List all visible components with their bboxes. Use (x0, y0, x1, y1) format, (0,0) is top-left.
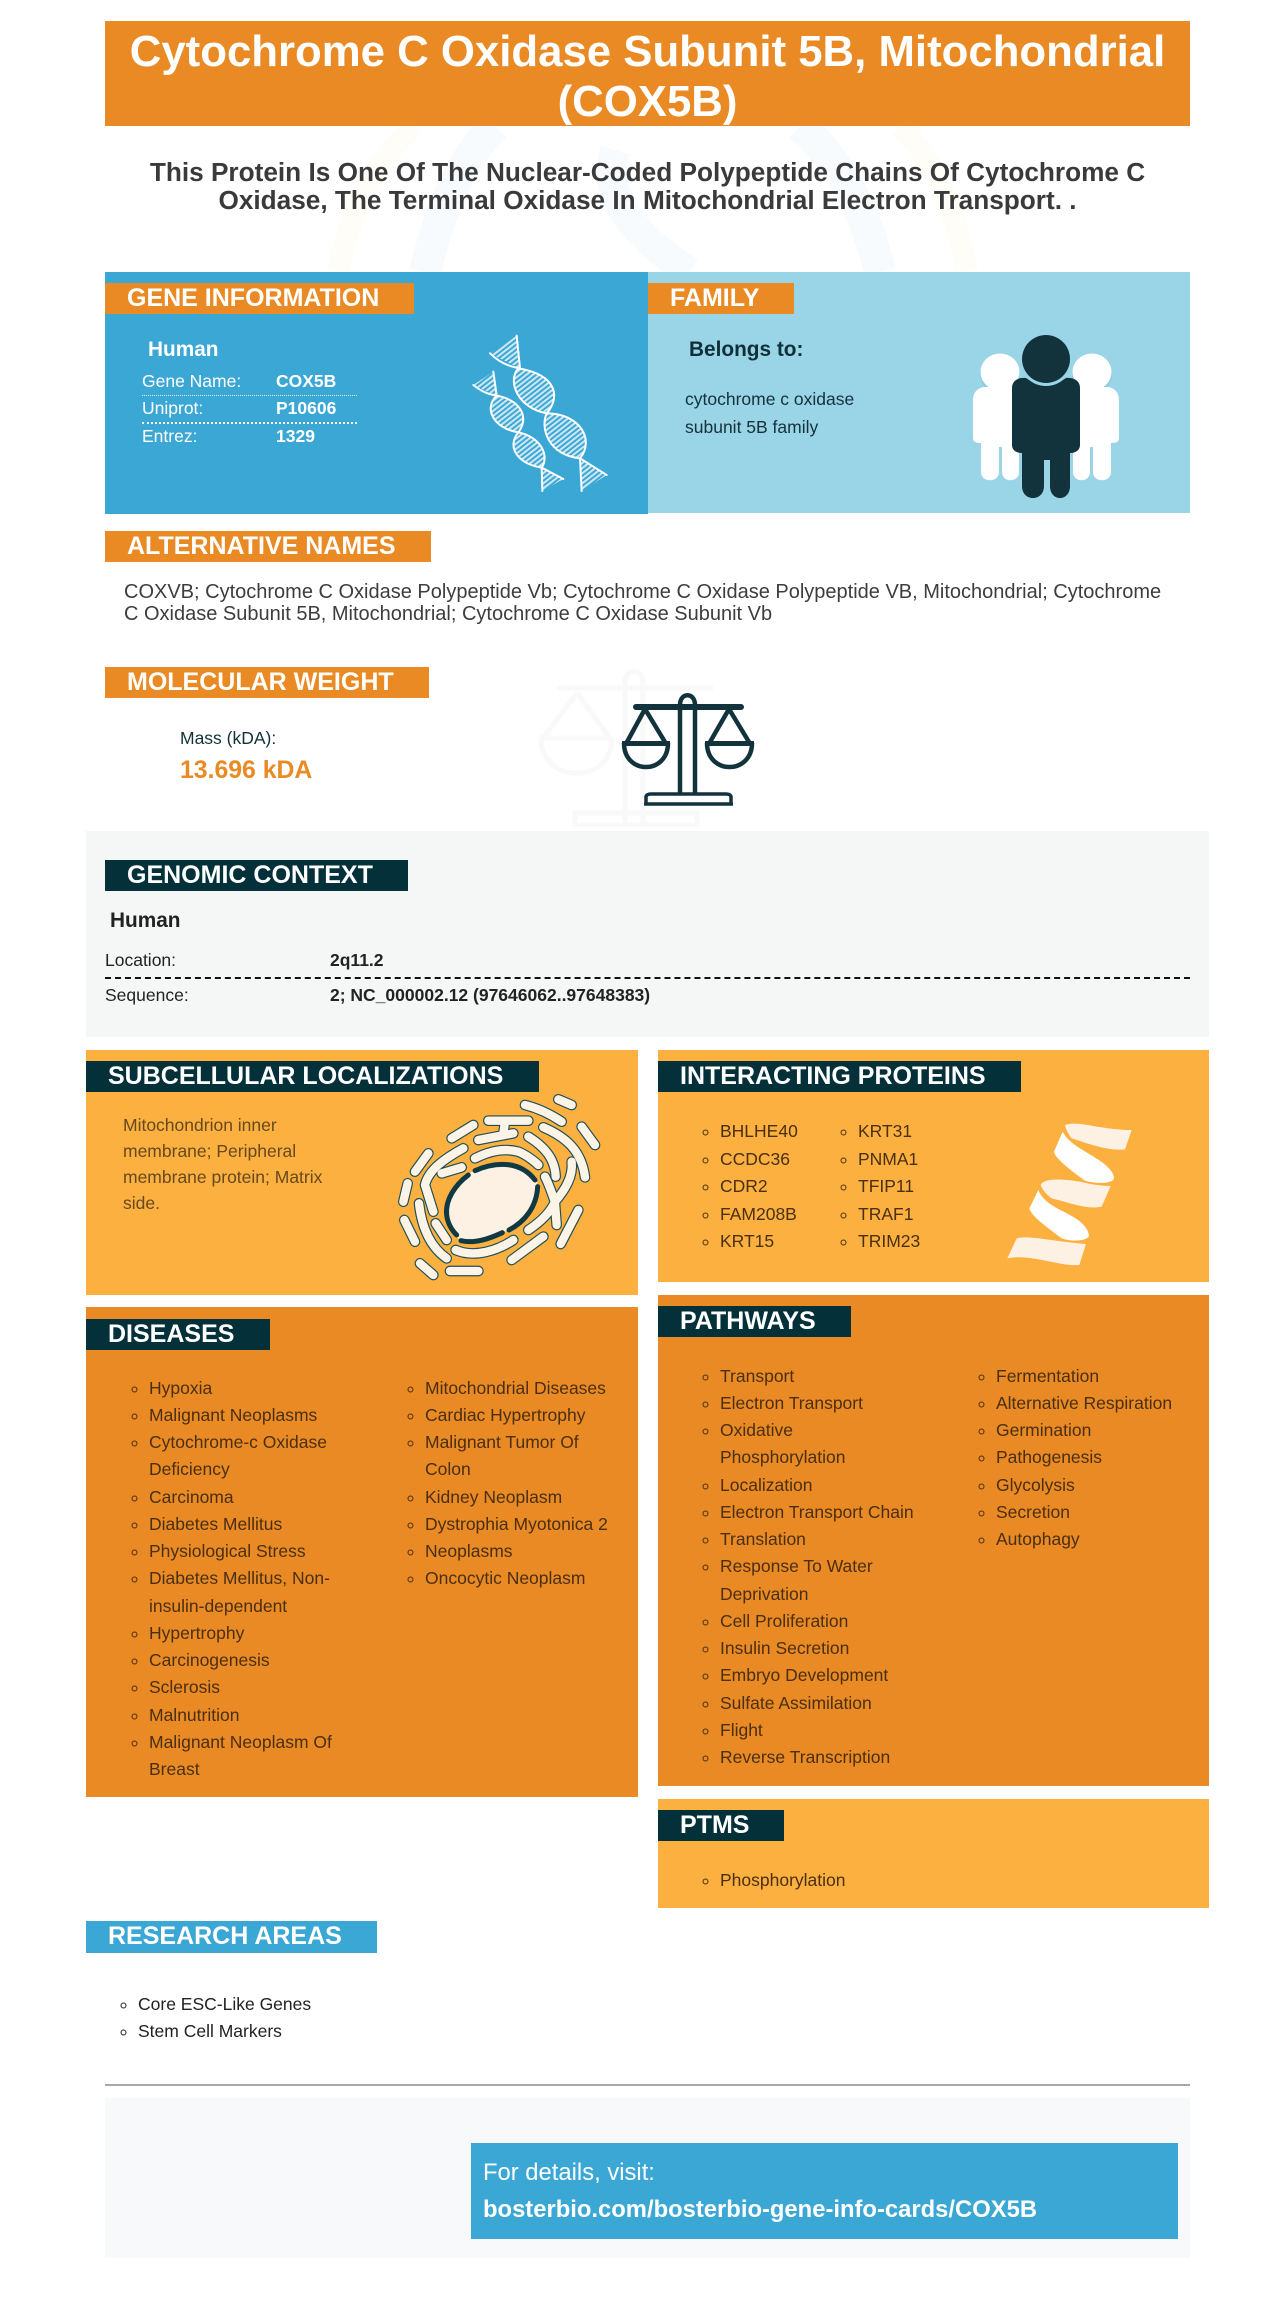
panel: subcellular localizations (86, 1050, 638, 1295)
sequence row (105, 985, 650, 1005)
family description (685, 389, 854, 437)
protein list column 2: TFIP11 (858, 1176, 914, 1196)
icon: protein helix ribbon (1007, 1124, 1132, 1266)
heading: diseases (86, 1319, 270, 1350)
pathway list column 1: Embryo Development (720, 1665, 888, 1685)
disease list column 2 (408, 1378, 608, 1588)
disease list column 1: Malnutrition (149, 1704, 239, 1724)
subtitle (150, 157, 1145, 215)
disease list column 1: Sclerosis (149, 1677, 220, 1697)
species label: Human (110, 909, 180, 932)
heading: family: FAMILY (670, 284, 759, 312)
protein list column 1 (702, 1121, 798, 1251)
pathway list column 2: Pathogenesis (996, 1447, 1102, 1467)
panel: genomic context: 2q11.2 (330, 950, 384, 970)
pathway list column 1: Deprivation (720, 1584, 809, 1604)
title: Cytochrome C Oxidase Subunit 5B, Mitochondrial (130, 27, 1165, 76)
uniprot row: P10606 (276, 398, 336, 418)
pathway list column 1: Insulin Secretion (720, 1638, 849, 1658)
callout: details link (471, 2143, 1178, 2239)
alternative names text (124, 581, 1161, 625)
disease list column 2: Mitochondrial Diseases (425, 1378, 606, 1398)
heading: ptms: PTMS (680, 1811, 749, 1839)
ptm list: Phosphorylation (720, 1870, 846, 1890)
panel: footer (105, 2098, 1190, 2258)
pathway list column 1: Response To Water (720, 1556, 873, 1576)
protein list column 2 (840, 1121, 920, 1251)
pathway list column 1: Cell Proliferation (720, 1611, 848, 1631)
icon: dna (472, 334, 608, 492)
panel: family (648, 272, 1190, 513)
callout: details link: For details, visit: (483, 2159, 655, 2186)
heading: subcellular localizations: SUBCELLULAR LOCALIZATIONS (108, 1062, 503, 1090)
gene name row: COX5B (276, 371, 336, 391)
heading: research areas: RESEARCH AREAS (108, 1922, 342, 1950)
disease list column 1: Hypertrophy (149, 1623, 244, 1643)
disease list column 1: Carcinoma (149, 1486, 234, 1506)
entrez row: Entrez: (142, 426, 197, 446)
disease list column 2: Malignant Tumor Of (425, 1432, 579, 1452)
entrez row (142, 426, 315, 446)
panel: genomic context (86, 831, 1209, 1037)
gene name row (142, 371, 336, 391)
sequence row: Sequence: (105, 985, 189, 1005)
mass label: Mass (kDA): (180, 728, 276, 748)
panel: diseases (86, 1307, 638, 1797)
pathway list column 1: Translation (720, 1529, 806, 1549)
pathway list column 1: Phosphorylation (720, 1447, 846, 1467)
entrez row: 1329 (276, 426, 315, 446)
icon: mitochondrion (398, 1094, 600, 1280)
family description: cytochrome c oxidase (685, 389, 854, 409)
disease list column 1: Physiological Stress (149, 1541, 306, 1561)
localization text (123, 1115, 322, 1213)
disease list column 1: insulin-dependent (149, 1596, 287, 1616)
protein list column 1: FAM208B (720, 1204, 797, 1224)
heading: genomic context: GENOMIC CONTEXT (127, 861, 373, 889)
disease list column 1: Malignant Neoplasms (149, 1405, 317, 1425)
disease list column 2: Oncocytic Neoplasm (425, 1568, 585, 1588)
disease list column 2: Dystrophia Myotonica 2 (425, 1514, 608, 1534)
localization text: membrane protein; Matrix (123, 1167, 322, 1187)
pathway list column 1: Localization (720, 1474, 812, 1494)
pathway list column 2 (978, 1366, 1172, 1549)
pathway list column 1: Sulfate Assimilation (720, 1692, 872, 1712)
disease list column 2: Neoplasms (425, 1541, 513, 1561)
heading: pathways: PATHWAYS (680, 1307, 816, 1335)
uniprot row (142, 398, 336, 418)
belongs to label: Belongs to: (689, 338, 803, 361)
heading: interacting proteins: INTERACTING PROTEINS (680, 1062, 986, 1090)
disease list column 1: Malignant Neoplasm Of (149, 1732, 332, 1752)
protein list column 2: KRT31 (858, 1121, 912, 1141)
heading: diseases: DISEASES (108, 1320, 234, 1348)
pathway list column 2: Germination (996, 1420, 1091, 1440)
icon: people (973, 335, 1119, 498)
pathway list column 1: Oxidative (720, 1420, 793, 1440)
pathway list column 2: Fermentation (996, 1366, 1099, 1386)
uniprot row: Uniprot: (142, 398, 203, 418)
gene name row: Gene Name: (142, 371, 241, 391)
disease list column 1 (132, 1378, 332, 1779)
subtitle: Oxidase, The Terminal Oxidase In Mitochondrial Electron Transport. . (218, 185, 1077, 215)
title: (COX5B) (558, 77, 737, 126)
pathway list column 2: Secretion (996, 1502, 1070, 1522)
panel: ptms (658, 1799, 1209, 1908)
pathway list column 1: Reverse Transcription (720, 1747, 890, 1767)
protein list column 1: KRT15 (720, 1231, 774, 1251)
protein list column 1: CCDC36 (720, 1148, 790, 1168)
protein list column 1: CDR2 (720, 1176, 768, 1196)
disease list column 1: Cytochrome-c Oxidase (149, 1432, 327, 1452)
pathway list column 1: Electron Transport Chain (720, 1502, 914, 1522)
protein list column 1: BHLHE40 (720, 1121, 798, 1141)
family description: subunit 5B family (685, 417, 818, 437)
heading: alternative names: ALTERNATIVE NAMES (127, 532, 396, 560)
heading: molecular weight: MOLECULAR WEIGHT (127, 668, 394, 696)
protein list column 2: PNMA1 (858, 1148, 918, 1168)
title (105, 21, 1190, 126)
callout: details link: bosterbio.com/bosterbio-gene-info-cards/COX5B (483, 2196, 1037, 2223)
heading: pathways (658, 1306, 851, 1337)
location row (105, 950, 384, 970)
pathway list column 1 (702, 1366, 914, 1767)
disease list column 1: Diabetes Mellitus (149, 1514, 282, 1534)
alternative names text: COXVB; Cytochrome C Oxidase Polypeptide Vb; Cytochrome C Oxidase Polypeptide VB, Mitochondrial; Cytochrome (124, 581, 1161, 603)
research areas list: Stem Cell Markers (138, 2021, 282, 2041)
subtitle: This Protein Is One Of The Nuclear-Coded Polypeptide Chains Of Cytochrome C (150, 157, 1145, 187)
disease list column 1: Breast (149, 1759, 200, 1779)
localization text: Mitochondrion inner (123, 1115, 277, 1135)
disease list column 1: Carcinogenesis (149, 1650, 270, 1670)
disease list column 1: Deficiency (149, 1459, 230, 1479)
heading: gene information: GENE INFORMATION (127, 284, 379, 312)
panel: genomic context: 2; NC_000002.12 (97646062..97648383) (330, 985, 650, 1005)
species label: Human (148, 338, 218, 361)
disease list column 2: Cardiac Hypertrophy (425, 1405, 585, 1425)
heading: ptms (658, 1810, 784, 1841)
location row: Location: (105, 950, 176, 970)
alternative names text: C Oxidase Subunit 5B, Mitochondrial; Cytochrome C Oxidase Subunit Vb (124, 603, 772, 625)
pathway list column 2: Alternative Respiration (996, 1393, 1172, 1413)
pathway list column 1: Electron Transport (720, 1393, 863, 1413)
panel: interacting proteins (658, 1050, 1209, 1282)
panel: gene information (105, 272, 648, 514)
pathway list column 2: Autophagy (996, 1529, 1080, 1549)
mass value: 13.696 kDA (180, 757, 312, 784)
disease list column 2: Colon (425, 1459, 471, 1479)
research areas list (120, 1994, 311, 2041)
pathway list column 1: Transport (720, 1366, 794, 1386)
protein list column 2: TRAF1 (858, 1204, 913, 1224)
localization text: membrane; Peripheral (123, 1141, 296, 1161)
disease list column 1: Diabetes Mellitus, Non- (149, 1568, 330, 1588)
disease list column 1: Hypoxia (149, 1378, 212, 1398)
pathway list column 2: Glycolysis (996, 1474, 1075, 1494)
heading: family (648, 283, 794, 314)
localization text: side. (123, 1193, 160, 1213)
panel: pathways (658, 1295, 1209, 1786)
research areas list: Core ESC-Like Genes (138, 1994, 311, 2014)
icon: faint scale watermark (530, 660, 720, 830)
disease list column 2: Kidney Neoplasm (425, 1486, 562, 1506)
pathway list column 1: Flight (720, 1720, 763, 1740)
icon: balance scale (622, 693, 754, 806)
protein list column 2: TRIM23 (858, 1231, 920, 1251)
